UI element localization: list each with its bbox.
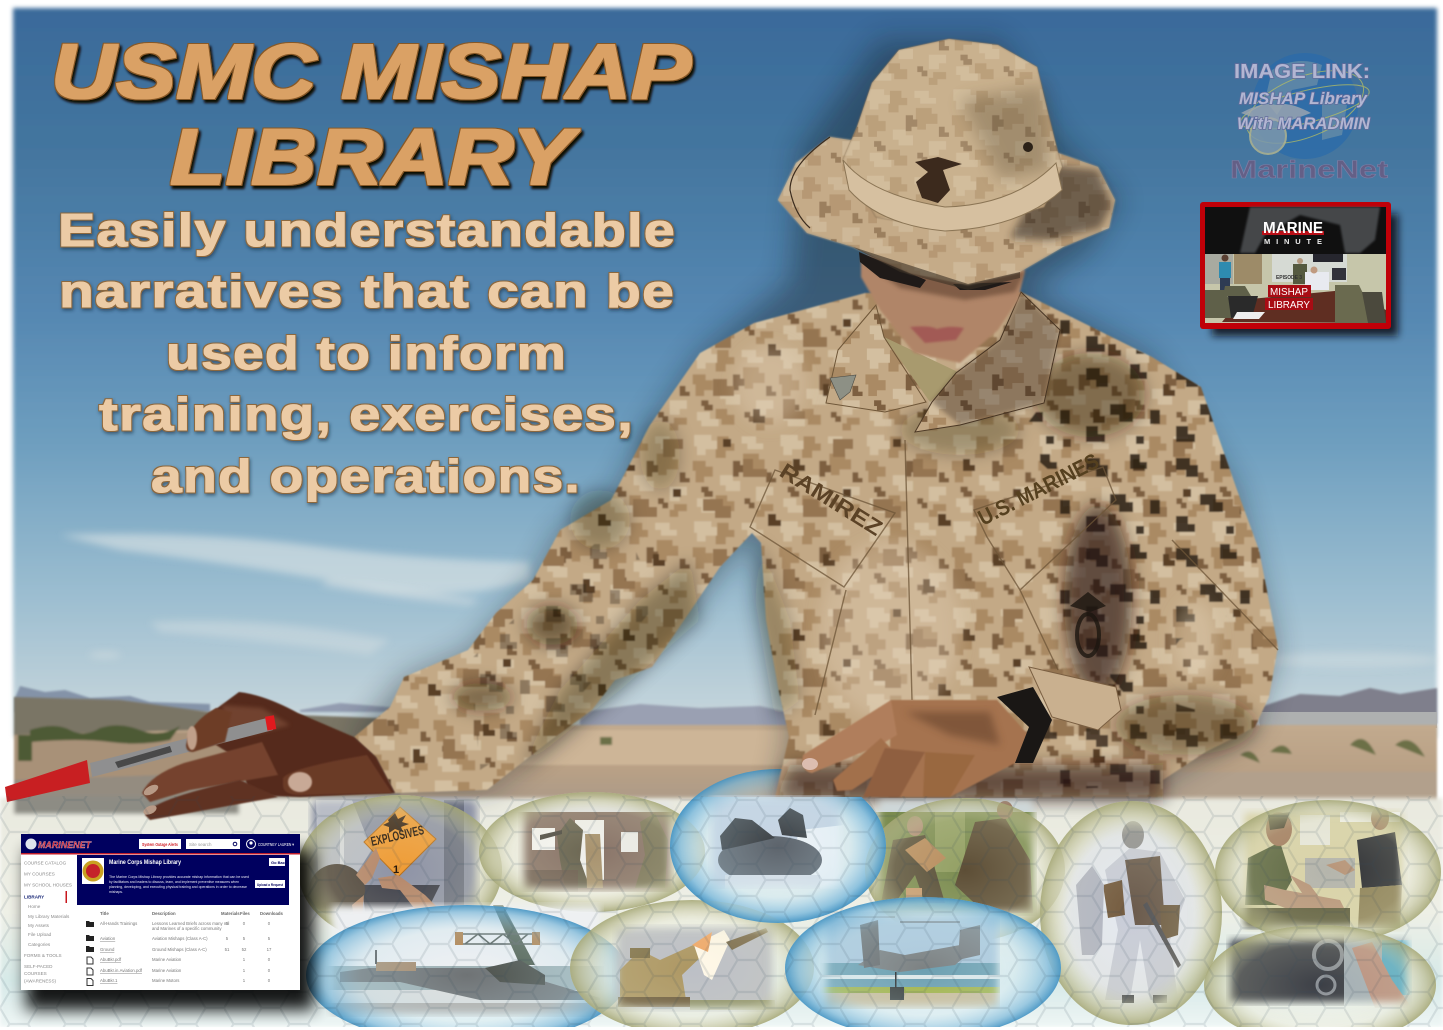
clouds (60, 534, 1440, 668)
site sidebar: MY SCHOOL HOUSES (24, 882, 72, 888)
site sidebar: (AWARENESS) (24, 978, 57, 984)
marker red cap (5, 760, 90, 802)
library banner: The Marine Corps Mishap Library provides accurate mishap information that can be used (109, 874, 249, 879)
service tape: U.S. MARINES (974, 448, 1103, 530)
silhouette band (1240, 207, 1380, 253)
library table: Files (240, 911, 250, 916)
library table: AbuBkr.1 (100, 978, 118, 983)
photo: explosives placard: EXPLOSIVES (369, 822, 425, 849)
library table: 0 (268, 921, 271, 926)
library table: 1 (243, 957, 246, 962)
library table: 0 (243, 921, 246, 926)
title: LIBRARY (170, 112, 580, 201)
website screenshot panel (21, 834, 314, 1010)
library table: Marine Motors (152, 978, 179, 983)
collage background (0, 796, 1443, 1027)
name tape: RAMIREZ (775, 458, 887, 541)
library table: 5 (226, 936, 229, 941)
Marine Minute logo: MINUTE (1264, 237, 1322, 246)
library table: 52 (242, 947, 247, 952)
back of hand and fingers (802, 700, 1033, 797)
bubble: medical exam (1215, 800, 1441, 944)
library table: 17 (267, 947, 272, 952)
boonie hat (778, 39, 1115, 290)
site sidebar: Categories (28, 942, 51, 947)
library banner: by facilitators and leaders to discuss, learn, and implement preventive measures when (109, 879, 239, 884)
photo: marines in building (518, 808, 674, 892)
photo: injured leg and equipment (1226, 934, 1412, 1008)
t-shirt (884, 337, 960, 402)
site sidebar: FORMS & TOOLS (24, 953, 62, 958)
library table: AbuBkr.pdf (100, 957, 122, 962)
library table: 0 (268, 957, 271, 962)
distant mountains (15, 686, 1437, 730)
nails (288, 772, 312, 792)
globe emblem (1236, 53, 1374, 159)
site sidebar: Home (28, 904, 41, 909)
marker barrel (90, 717, 273, 777)
site header (21, 834, 300, 854)
link label: MISHAP Library (1239, 89, 1369, 108)
wrist watch (997, 687, 1052, 763)
bottom fade (0, 1027, 1443, 1030)
link label: With MARADMIN (1237, 114, 1371, 133)
site sidebar (24, 860, 72, 984)
description text: and operations. (151, 450, 581, 502)
photo: corpsman and patient (1240, 806, 1408, 932)
title: USMC MISHAP (51, 29, 692, 115)
episode tag: EPISODE 3 (1276, 275, 1302, 281)
library table: 5 (268, 936, 271, 941)
library table: AbuBkr.in.Aviation.pdf (100, 968, 143, 973)
library table: 51 (225, 947, 230, 952)
MarineNet wordmark: MarineNet (1230, 156, 1389, 184)
site sidebar: My Library Materials (28, 914, 70, 919)
site sidebar: LIBRARY (24, 894, 44, 900)
Mishap Library label: MISHAP (1270, 286, 1308, 298)
uniform shading (452, 353, 1255, 800)
bubble: landing craft (306, 902, 628, 1030)
sky with soft edges (13, 8, 1437, 738)
palm (212, 692, 395, 797)
library banner: Upload a Request (257, 882, 284, 887)
placard diamond (364, 807, 436, 877)
description text: used to inform (166, 327, 567, 379)
site sidebar: MY COURSES (24, 872, 55, 876)
photo: MV-22 external lift (820, 912, 1000, 1009)
photo: marines in raiding craft (708, 795, 844, 889)
library table: Lessons Learned Briefs across many mil (152, 921, 229, 926)
desert ground (14, 697, 1437, 815)
library banner: Go Back (271, 860, 288, 865)
bubble: medical gear (1204, 925, 1436, 1030)
shirt seams and pocket flaps (750, 440, 1278, 715)
library table (86, 911, 284, 986)
library table: 1 (243, 978, 246, 983)
thumbnail shadow (1212, 214, 1398, 336)
right hand with watch (802, 687, 1052, 797)
library table: Aviation Mishaps (Class A-C) (152, 936, 208, 941)
link label (1234, 61, 1371, 133)
library table: Marine Aviation (152, 968, 182, 973)
link label: IMAGE LINK: (1234, 61, 1370, 83)
bubble: rocket launcher (570, 900, 814, 1030)
site header: COURTNEY LAUREN ▾ (258, 842, 295, 847)
photo: HIMARS firing (612, 924, 777, 1012)
Marine Minute logo (1262, 220, 1324, 246)
library table: 0 (268, 978, 271, 983)
site sidebar: COURSE CATALOG (24, 860, 67, 866)
left hand holding pen (5, 692, 395, 820)
face (859, 252, 1025, 363)
description text: training, exercises, (99, 388, 634, 440)
chest emblem (1070, 592, 1106, 656)
bubble: osprey (785, 897, 1061, 1030)
soldier shadow halo (354, 40, 1278, 790)
site header: Site search (189, 842, 212, 847)
library table: 5 (243, 936, 246, 941)
library banner: mishaps. (109, 889, 123, 894)
library table: All-Hands Trainings (100, 921, 137, 926)
photo: marines with box (875, 798, 1037, 916)
library table: 0 (268, 968, 271, 973)
library table: Materials (221, 911, 240, 916)
Marine Minute logo: MARINE (1263, 220, 1323, 237)
uniform body (354, 292, 1278, 797)
conference room photo (1205, 254, 1386, 323)
Marine Minute video thumbnail (1200, 202, 1398, 336)
hexagon overlay (0, 796, 1443, 1028)
bubble rim behind soldier: raiding craft (670, 769, 886, 923)
collars (826, 292, 1060, 432)
library table: 1 (243, 968, 246, 973)
soldier figure (354, 39, 1278, 800)
library table: Title (100, 911, 109, 916)
description text: Easily understandable (58, 204, 676, 256)
photo: explosives placard: 1 (393, 864, 399, 876)
bubble: cold weather marine (1040, 801, 1222, 1025)
bubble: green field (865, 798, 1065, 942)
photo: snow soldier (1060, 821, 1197, 1003)
library table: Marine Aviation (152, 957, 182, 962)
description text: narratives that can be (59, 265, 675, 317)
right sleeve cuff (1029, 667, 1121, 730)
MarineNet image link (1230, 53, 1389, 184)
bubble: explosives (298, 795, 502, 945)
Mishap Library label (1265, 285, 1313, 311)
description text (58, 204, 676, 502)
fingers (186, 708, 232, 752)
library table: and Marines of a specific community (152, 926, 222, 931)
library banner: planning, developing, and executing physical training and operations in order to decrease (109, 884, 247, 889)
library table: Downloads (260, 911, 284, 916)
library banner: Marine Corps Mishap Library (109, 859, 181, 866)
library table: Ground (100, 947, 115, 952)
photo: explosives placard (308, 796, 480, 922)
site sidebar: My Assets (28, 923, 50, 928)
site sidebar: SELF-PACED (24, 964, 53, 969)
library table: Aviation (100, 936, 116, 941)
panel shadow (26, 850, 314, 1010)
library table: Ground Mishaps (Class A-C) (152, 947, 207, 952)
site header: MARINENET (38, 840, 92, 850)
site header: System Outage Alerts (142, 842, 178, 847)
library table: 0 (226, 921, 229, 926)
library banner (77, 855, 289, 905)
photo: causeway and crane (326, 902, 604, 1017)
site sidebar: File Upload (28, 932, 52, 937)
library table: Description (152, 911, 176, 916)
Mishap Library label: LIBRARY (1268, 299, 1310, 311)
site sidebar: COURSES (24, 971, 47, 976)
title (51, 29, 692, 201)
bubble: room clearing (479, 792, 705, 912)
bubble: raiding craft (670, 795, 886, 923)
